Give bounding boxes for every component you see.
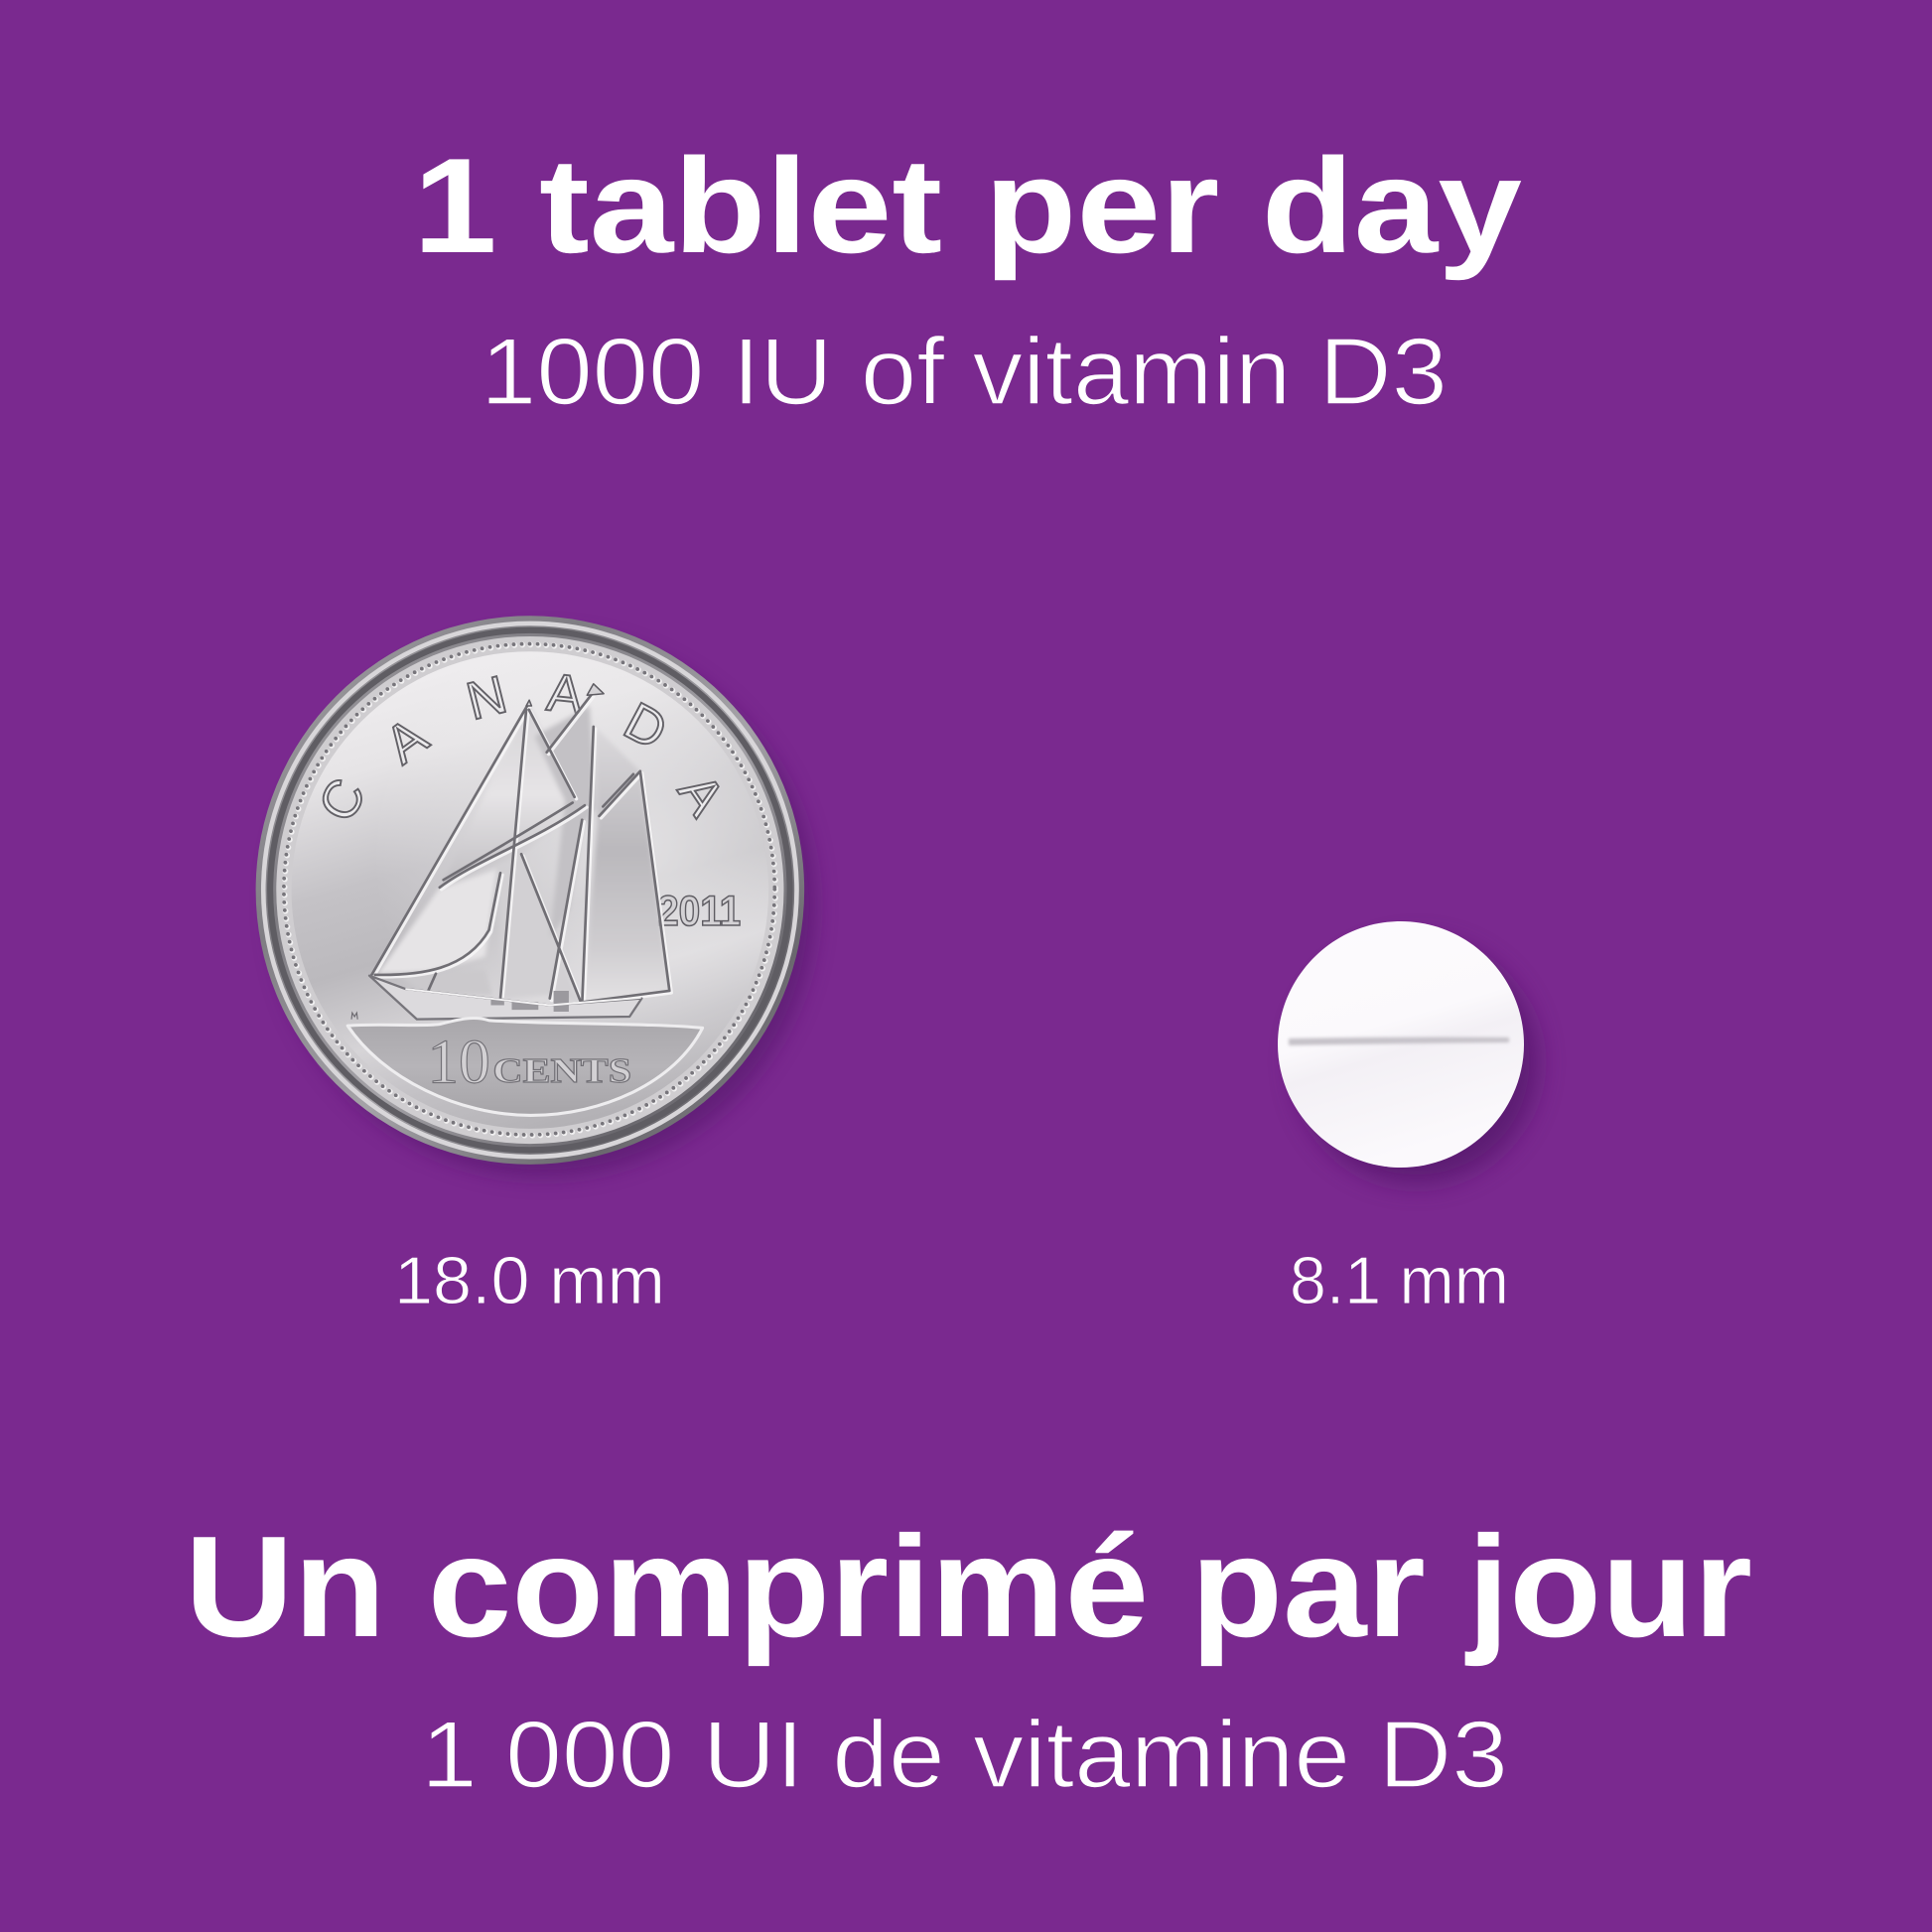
tablet shadow xyxy=(1296,941,1538,1183)
coin lettering: year: 2011 xyxy=(657,888,741,935)
coin lettering: CANADA: A xyxy=(667,763,736,826)
schooner rigging xyxy=(371,684,671,1007)
tablet score line xyxy=(1289,1037,1509,1045)
coin lettering: CANADA: A xyxy=(375,707,439,775)
coin lettering: 10 CENTS: CENTS xyxy=(492,1051,631,1090)
coin lettering: CANADA: C xyxy=(308,769,377,831)
coin lettering: 10 CENTS: 10 xyxy=(428,1028,490,1097)
subtitle: English: 1000 IU of vitamin D3 xyxy=(481,319,1448,425)
coin beaded edge xyxy=(284,644,775,1136)
schooner sails xyxy=(377,704,669,1004)
coin lettering: CANADA: N xyxy=(461,665,512,732)
tablet body xyxy=(1278,921,1524,1168)
subtitle: French: 1 000 UI de vitamine D3 xyxy=(421,1702,1508,1808)
title: English: 1 tablet per day xyxy=(413,130,1522,281)
coin shadow xyxy=(272,633,816,1176)
coin lettering: 10 CENTS xyxy=(428,1028,631,1097)
icon: white tablet xyxy=(1278,921,1538,1183)
mint mark xyxy=(351,1013,357,1020)
coin field xyxy=(292,651,768,1129)
label: coin diameter: 18.0 mm xyxy=(394,1243,665,1318)
schooner hull xyxy=(369,976,641,1020)
coin lettering: CANADA: D xyxy=(615,692,676,761)
sea and value panel xyxy=(347,1018,703,1115)
icon: 10 cent Canadian coin xyxy=(256,616,816,1176)
coin rim xyxy=(256,616,804,1165)
coin lettering: CANADA xyxy=(308,663,736,831)
mast tops xyxy=(526,684,604,706)
label: tablet diameter: 8.1 mm xyxy=(1290,1243,1509,1318)
coin lettering: CANADA: A xyxy=(544,663,586,726)
title: French: Un comprimé par jour xyxy=(185,1506,1752,1667)
